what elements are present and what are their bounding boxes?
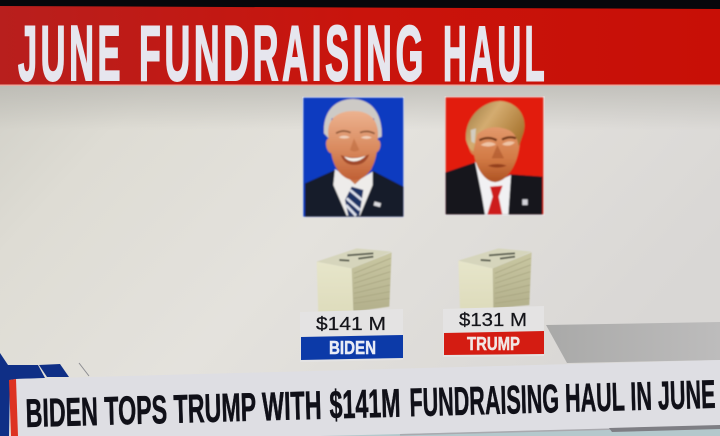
title banner: HAUL — [443, 10, 548, 98]
title — [18, 9, 548, 98]
amount: Trump: $131 M — [459, 310, 527, 330]
title banner — [0, 6, 720, 98]
portrait: Biden — [302, 97, 404, 218]
name bar: Biden: BIDEN — [329, 338, 376, 358]
title: JUNE — [18, 9, 124, 97]
money stack: Trump — [458, 248, 532, 308]
label card: Biden — [300, 309, 403, 362]
money stack: Biden — [317, 248, 392, 315]
lower third — [9, 360, 720, 436]
blue corner graphic — [0, 353, 89, 436]
name bar: Trump: TRUMP — [467, 334, 520, 354]
top black screen edge — [0, 0, 720, 10]
portrait: Trump — [445, 96, 545, 216]
headline — [25, 373, 716, 436]
headline: $141M — [329, 382, 401, 428]
headline: BIDEN TOPS TRUMP WITH — [25, 384, 322, 436]
label card: Trump — [443, 306, 544, 357]
grey floor shape — [546, 322, 720, 363]
amount: Biden: $141 M — [316, 314, 386, 334]
